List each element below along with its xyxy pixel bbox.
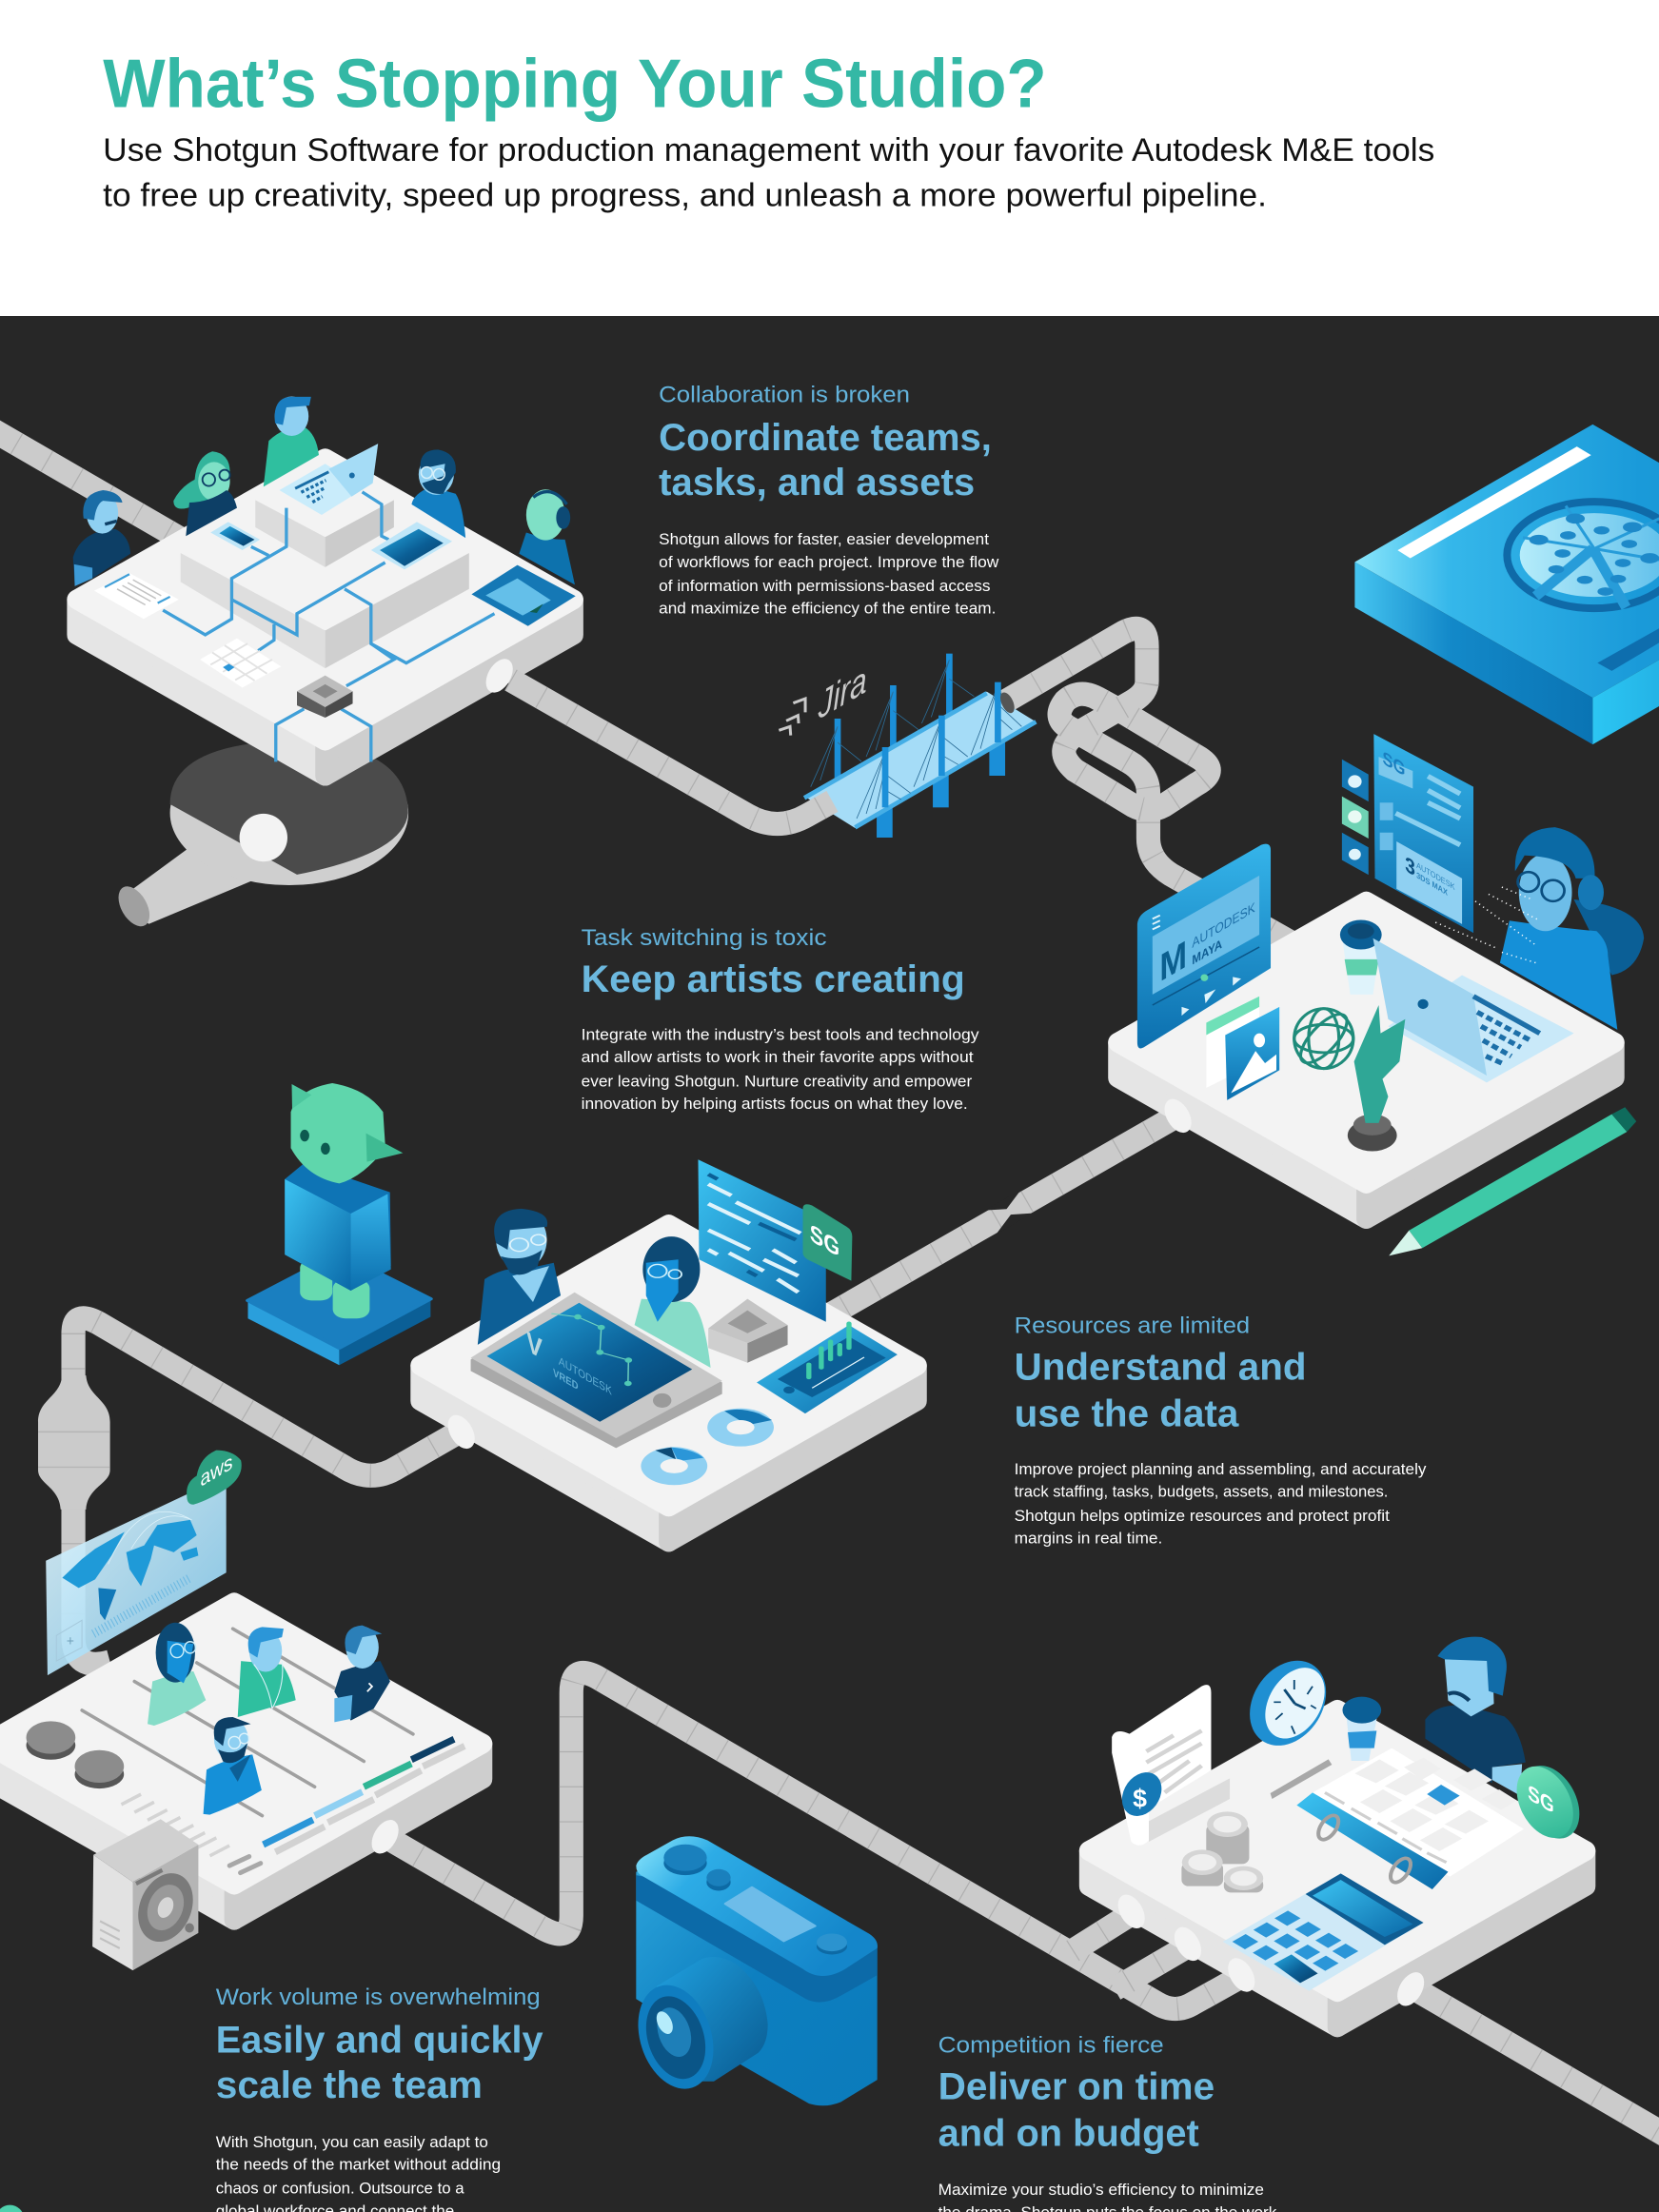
Jira chevrons [779,699,805,736]
person: woman with green hair [173,451,237,536]
blue connection lines [163,492,494,761]
coffee cup [1342,1697,1381,1761]
SG badge [803,1204,852,1281]
pipe connector [443,1411,481,1453]
donut chart left [641,1447,707,1485]
panel: data platform [421,1159,917,1542]
text block: resources: Improve project planning and assembling, and accurately [1015,1461,1427,1478]
VRED labels: V [526,1325,543,1366]
text block: work volume: With Shotgun, you can easily adapt to [216,2134,488,2151]
icon: ping pong paddle [112,741,408,932]
laptop [1373,938,1574,1082]
text block: task switching [582,926,980,1113]
speaker box [92,1819,204,1970]
code panel [698,1159,826,1322]
text block: collaboration: Coordinate teams, [659,417,992,459]
camera body [636,1840,878,2105]
router box [708,1299,788,1363]
Maya labels: M [1159,933,1187,991]
SG and 3ds Max labels: 3 [1405,851,1415,881]
pipe: knot after bridge [1006,628,1291,942]
tablet large [371,522,452,569]
icon: blue camera [625,1836,878,2105]
VRED labels: VRED [553,1367,579,1393]
image card [1206,997,1279,1100]
trophy [1293,1005,1405,1152]
text block: collaboration [659,383,999,618]
wall calendar [1296,1748,1524,1889]
Jira label: Jira [818,658,867,728]
VRED labels: AUTODESK [559,1353,612,1398]
stepped tiers [181,457,469,668]
control knobs [27,1721,124,1788]
pipe connector [1159,1095,1196,1137]
icon: blue pizza box [1354,425,1659,744]
panel: scale platform [0,1449,483,1970]
dials [663,1845,847,1954]
text block: collaboration: Shotgun allows for faster, easier development [659,531,989,548]
text block: task switching: and allow artists to work in their favorite apps without [582,1049,974,1066]
person: bearded man [204,1717,262,1815]
dashboard panel [471,565,576,626]
pipe: pinched section between platforms [832,1115,1179,1313]
icon: green pencil [1389,1107,1636,1255]
world map screen [46,1475,227,1675]
pipe connectors [1113,1890,1430,2010]
document [94,573,179,619]
calendar rings [1314,1812,1414,1886]
person: man with earbuds [238,1627,296,1717]
pipe: entering from left edge [0,426,190,544]
text block: competition: Deliver on time [938,2065,1215,2107]
subtitle: to free up creativity, speed up progress, and unleash a more powerful pipeline. [103,177,1267,213]
person: man in green hoodie [264,396,319,486]
text block: competition: Competition is fierce [938,2034,1164,2059]
text block: collaboration: Collaboration is broken [659,383,910,407]
person: woman with headphones [519,489,575,584]
panel: task switching platform [1118,734,1644,1219]
large tablet [471,1293,722,1448]
laptop on top tier [279,444,378,515]
phone with bar chart [757,1323,898,1413]
calendar [200,639,281,688]
aws cloud badge [187,1451,242,1505]
dollar coin [1115,1767,1169,1822]
calculator [1223,1873,1424,1991]
slider tracks [82,1629,413,1816]
bridge deck [804,692,1036,828]
pipe: bend into bridge deck [511,680,832,824]
clock [1235,1649,1341,1757]
white header band [0,0,1659,316]
Maya labels: AUTODESK [1192,899,1255,951]
text block: resources: track staffing, tasks, budgets, assets, and milestones. [1015,1484,1388,1501]
bridge with Jira label [779,654,1036,838]
label strip [1397,446,1591,558]
panel: budget platform [1089,1637,1590,2027]
text block: resources: Understand and [1015,1347,1306,1389]
Maya labels: MAYA [1192,936,1222,968]
text block: work volume: Work volume is overwhelming [216,1985,541,2010]
text block: resources: use the data [1015,1392,1239,1434]
display [725,1887,816,1941]
Maya labels [1159,899,1255,991]
VRED labels [526,1325,612,1398]
tablet small [210,522,260,550]
coffee cup [1340,919,1382,995]
top plate [636,1836,878,1976]
floating SG panel [1373,734,1473,933]
router box [297,676,353,718]
dark bar [1597,626,1659,671]
green marker dot at bottom-left edge [0,2205,24,2212]
pipe: with bulge to map [38,1318,464,1664]
text block: resources: Shotgun helps optimize resources and protect profit [1015,1508,1390,1525]
text block: task switching: innovation by helping artists focus on what they love. [582,1096,968,1113]
SG and 3ds Max labels: SG [1382,748,1405,781]
text block: resources: margins in real time. [1015,1530,1162,1547]
pipe connector [366,1815,405,1858]
SG and 3ds Max labels [1382,748,1455,898]
world map screen: + [67,1633,74,1649]
text block: task switching: Task switching is toxic [582,926,827,951]
SG and 3ds Max labels: 3DS MAX [1416,870,1448,898]
SG and 3ds Max labels: AUTODESK [1416,859,1455,892]
text block: work volume: chaos or confusion. Outsource to a [216,2181,465,2198]
lens front [625,1975,726,2099]
app icon tiles [1342,760,1369,875]
text block: competition [938,2034,1277,2212]
person: woman with curly hair [635,1236,711,1368]
SG badge label: SG [810,1219,839,1263]
text block: task switching: Integrate with the industry’s best tools and technology [582,1026,980,1043]
dark band [636,1875,878,2003]
rear towers [835,654,953,779]
tick marks [121,1794,229,1856]
person: man left [73,490,130,586]
text block: collaboration: of workflows for each project. Improve the flow [659,554,999,571]
cables [811,660,1021,819]
person: bearded man [411,449,465,538]
piers [877,742,1005,838]
SG coin [1506,1758,1590,1847]
pipe: exit right edge [1415,1989,1659,2143]
text block: collaboration: tasks, and assets [659,462,975,504]
text block: resources [1015,1314,1427,1547]
text block: task switching: Keep artists creating [582,958,965,1000]
front towers [882,682,1001,807]
person: woman with headset [1435,827,1644,1030]
aws label: aws [200,1449,232,1491]
coin stacks [1181,1811,1263,1892]
media player panel [1137,844,1271,1048]
person: man [1425,1637,1526,1796]
stylus [1271,1759,1332,1799]
text block: task switching: ever leaving Shotgun. Nurture creativity and empower [582,1073,973,1090]
text block: collaboration: of information with permissions-based access [659,578,990,595]
donut chart right [707,1409,774,1447]
text block: work volume: Easily and quickly [216,2020,543,2062]
person: woman [148,1623,206,1726]
text block: competition: and on budget [938,2112,1199,2154]
pizza emblem [1507,502,1659,608]
receipt [1112,1685,1230,1846]
text block: resources: Resources are limited [1015,1314,1250,1339]
text block: work volume: scale the team [216,2064,483,2106]
title: What’s Stopping Your Studio? [103,46,1047,123]
text block: work volume [216,1985,543,2212]
lens barrel [657,1957,768,2082]
subtitle: Use Shotgun Software for production management with your favorite Autodesk M&E tools [103,132,1434,168]
dollar label: $ [1133,1785,1147,1813]
text block: work volume: the needs of the market without adding [216,2157,501,2174]
text block: collaboration: and maximize the efficiency of the entire team. [659,601,996,618]
person: bearded man [478,1209,561,1345]
panel: collaboration platform [73,396,576,776]
SG coin label: SG [1528,1780,1554,1819]
text block: competition: Maximize your studio’s efficiency to minimize [938,2182,1264,2199]
subtitle [103,132,1434,213]
icon: green robot figure [247,1083,430,1365]
pipe connector [481,654,519,698]
person: man with t-shirt [334,1626,390,1722]
pipe: long diagonal to competition platform [388,1672,1241,2009]
progress bars [264,1739,464,1852]
